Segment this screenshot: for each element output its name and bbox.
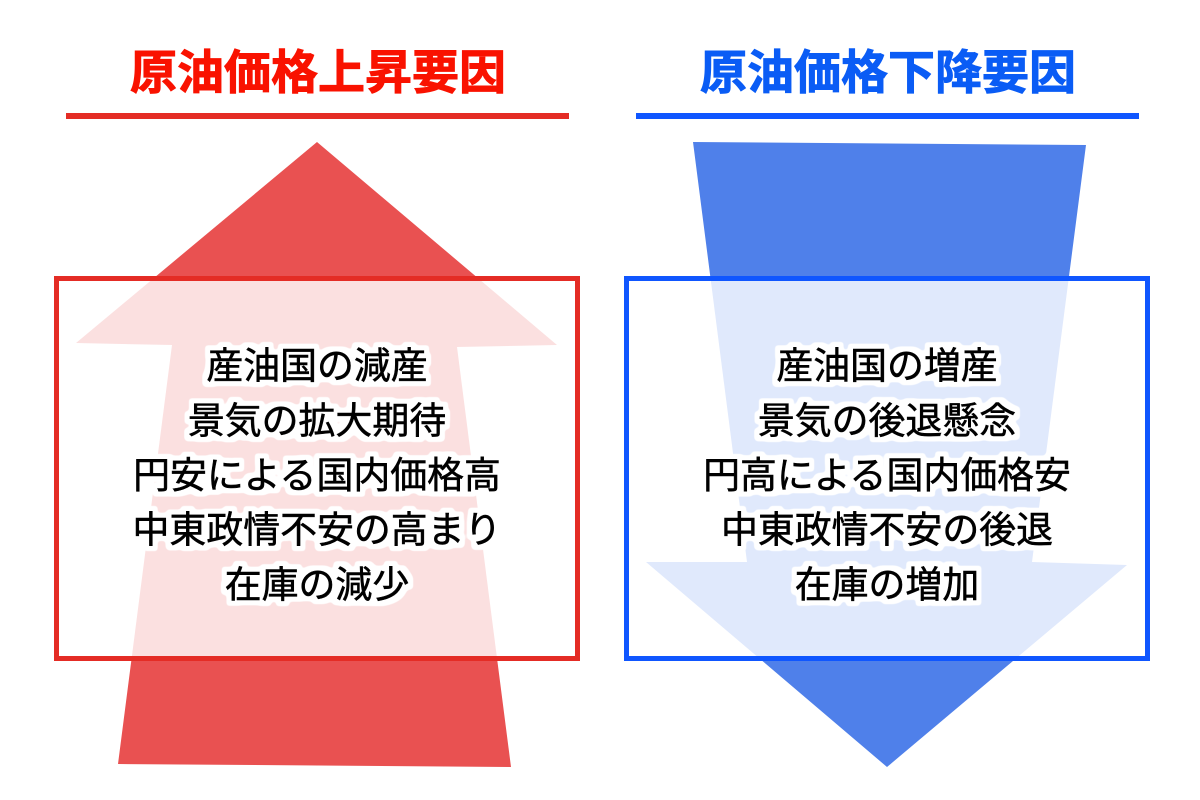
panel: falling factors bbox=[626, 46, 1148, 767]
list: rising factors: 景気の拡大期待 bbox=[188, 400, 446, 442]
heading: falling factors: 原油価格下降要因 bbox=[700, 46, 1076, 99]
list: falling factors: 円高による国内価格安 bbox=[703, 455, 1071, 496]
heading: rising factors: 原油価格上昇要因 bbox=[130, 46, 506, 99]
list: falling factors: 景気の後退懸念 bbox=[758, 400, 1016, 442]
panel: rising factors bbox=[56, 46, 578, 767]
list: rising factors: 産油国の減産 bbox=[206, 346, 428, 386]
list: rising factors bbox=[133, 346, 501, 606]
list: rising factors: 在庫の減少 bbox=[225, 564, 409, 606]
arrow: down bbox=[646, 142, 1127, 767]
list: rising factors: 中東政情不安の高まり bbox=[133, 510, 501, 550]
list: rising factors: 円安による国内価格高 bbox=[133, 455, 501, 496]
list: falling factors: 産油国の増産 bbox=[776, 346, 998, 386]
heading underline: red bbox=[66, 113, 569, 119]
list: falling factors: 在庫の増加 bbox=[795, 564, 979, 606]
heading underline: blue bbox=[636, 113, 1139, 119]
text box: falling factors bbox=[626, 278, 1148, 658]
list: falling factors bbox=[703, 346, 1071, 606]
arrow: up bbox=[76, 142, 557, 767]
text box: rising factors bbox=[56, 278, 578, 658]
list: falling factors: 中東政情不安の後退 bbox=[721, 510, 1053, 550]
